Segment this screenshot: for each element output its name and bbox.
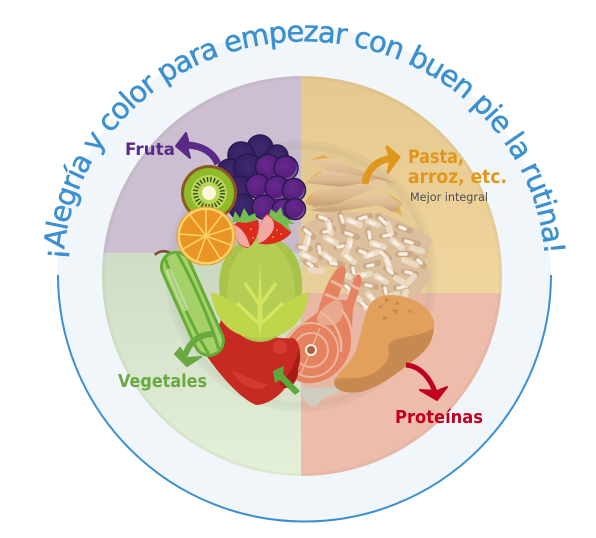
title: ¡Alegría y color para empezar con buen pie la rutina! — [44, 25, 566, 256]
plate base — [57, 28, 551, 522]
outer blue rim line — [58, 275, 551, 522]
food: grapes — [217, 135, 306, 221]
label: Pasta: Pasta, — [408, 146, 464, 168]
arrow: proteins — [406, 365, 447, 400]
arrow: pasta — [365, 147, 399, 184]
food: pasta — [304, 155, 405, 216]
food: kiwi — [181, 165, 237, 221]
strawberry: right — [258, 214, 291, 244]
label: Vegetales: Vegetales — [118, 371, 207, 392]
quadrant: fruit — [100, 74, 301, 253]
panel: four food quadrants — [100, 74, 503, 477]
food: red pepper — [206, 318, 300, 405]
inner plate well — [170, 145, 432, 407]
food: rice — [298, 212, 433, 322]
note: Mejor integral: Mejor integral — [410, 190, 488, 204]
salmon bone — [306, 345, 316, 355]
food: cucumber — [154, 242, 228, 360]
label: arroz, etc.: arroz, etc. — [408, 166, 507, 188]
quadrant: pasta and rice — [301, 74, 503, 293]
bone shadow — [301, 385, 340, 407]
pepper stem — [273, 366, 300, 395]
quadrant: proteins — [301, 293, 503, 477]
food: orange slice — [177, 207, 235, 265]
food: chicken leg — [334, 295, 434, 392]
strawberry: left — [234, 219, 259, 248]
food: lettuce — [211, 236, 309, 342]
arrow: vegetables — [175, 334, 214, 366]
rice base — [298, 212, 433, 322]
food: strawberries — [232, 207, 295, 248]
food: salmon steak — [284, 266, 362, 407]
plate rim — [104, 78, 500, 474]
salmon belly cavity — [317, 300, 343, 325]
label: Proteínas: Proteínas — [395, 407, 483, 428]
arrow: fruit — [176, 133, 218, 164]
lettuce veins — [237, 263, 283, 336]
quadrant: vegetables — [100, 253, 301, 477]
label: Fruta: Fruta — [125, 140, 175, 160]
